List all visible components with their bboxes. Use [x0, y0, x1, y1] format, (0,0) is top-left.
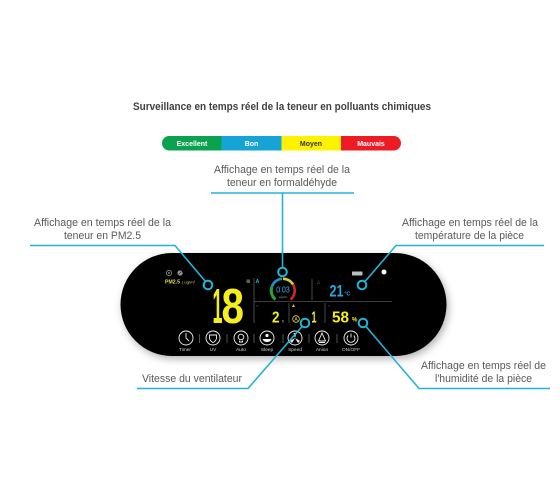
button separators	[200, 334, 337, 343]
button: Anion: Anion	[316, 347, 328, 353]
PM2.5 reading: 1	[212, 280, 222, 334]
callout: formaldehyde: teneur en formaldéhyde	[227, 177, 337, 189]
mode indicators: ○	[256, 303, 259, 308]
humidity reading: 58	[332, 310, 349, 326]
mode indicators: ○	[328, 303, 331, 308]
mode indicators: ▲	[291, 303, 296, 309]
button: Auto	[234, 331, 248, 353]
callout: humidity: Affichage en temps réel de	[421, 360, 546, 372]
button: Anion	[315, 331, 329, 353]
air quality scale legend: Bon	[245, 141, 258, 148]
status icons	[166, 270, 183, 276]
callout: PM2.5: Affichage en temps réel de la	[34, 217, 172, 229]
button: Timer	[179, 331, 193, 353]
callout: humidity: l'humidité de la pièce	[435, 373, 532, 385]
formaldehyde gauge	[271, 279, 295, 300]
mode indicators: △	[317, 279, 321, 284]
callout: formaldehyde	[211, 164, 354, 276]
button: UV: UV	[210, 347, 217, 353]
indicator dot	[382, 270, 386, 274]
callout: PM2.5: teneur en PM2.5	[64, 230, 141, 242]
air quality scale legend: Excellent	[177, 141, 208, 148]
control panel display	[120, 253, 446, 356]
timer reading: h	[282, 318, 284, 324]
fan speed reading: A	[294, 317, 298, 323]
PM2.5 unit label: PM2.5	[165, 280, 180, 286]
button: Speed: Speed	[288, 347, 302, 353]
temperature reading: °C	[344, 292, 350, 298]
callout: PM2.5	[30, 217, 212, 289]
button: ON/OFF	[342, 331, 360, 353]
PM2.5 unit label: | ug/m³	[182, 280, 196, 284]
callout: temperature	[358, 217, 544, 289]
mode indicators: A	[256, 279, 260, 285]
callout: temperature: température de la pièce	[415, 230, 524, 242]
humidity reading	[332, 310, 358, 326]
timer reading: 2	[272, 310, 280, 326]
button: UV	[206, 331, 220, 353]
air quality scale legend	[162, 136, 401, 151]
air quality scale legend: Mauvais	[357, 141, 385, 148]
callout: fan speed: Vitesse du ventilateur	[142, 373, 242, 385]
fan speed reading: 1	[312, 310, 317, 326]
PM2.5 reading: 8	[222, 280, 244, 334]
display grid	[254, 278, 392, 323]
callout: humidity	[359, 319, 550, 388]
callout: formaldehyde: Affichage en temps réel de la	[214, 164, 351, 176]
callout: temperature: Affichage en temps réel de la	[402, 217, 539, 229]
title: Surveillance en temps réel de la teneur en polluants chimiques	[133, 101, 431, 113]
humidity reading: %	[352, 318, 358, 324]
formaldehyde gauge: 0.03	[276, 286, 290, 294]
battery icon	[352, 272, 362, 276]
callout: fan speed	[137, 319, 309, 388]
button: Timer: Timer	[179, 347, 191, 353]
button: Auto: Auto	[236, 347, 246, 353]
mode indicators	[246, 279, 331, 309]
temperature reading: 21	[330, 281, 344, 300]
button: Sleep	[260, 331, 274, 353]
fan speed reading	[293, 310, 317, 326]
button: Speed	[288, 331, 302, 353]
button: Sleep: Sleep	[261, 347, 273, 353]
formaldehyde gauge: mg/m³	[279, 295, 287, 299]
PM2.5 unit label	[165, 280, 196, 286]
button: ON/OFF: ON/OFF	[342, 347, 360, 353]
air quality scale legend: Moyen	[300, 141, 322, 148]
